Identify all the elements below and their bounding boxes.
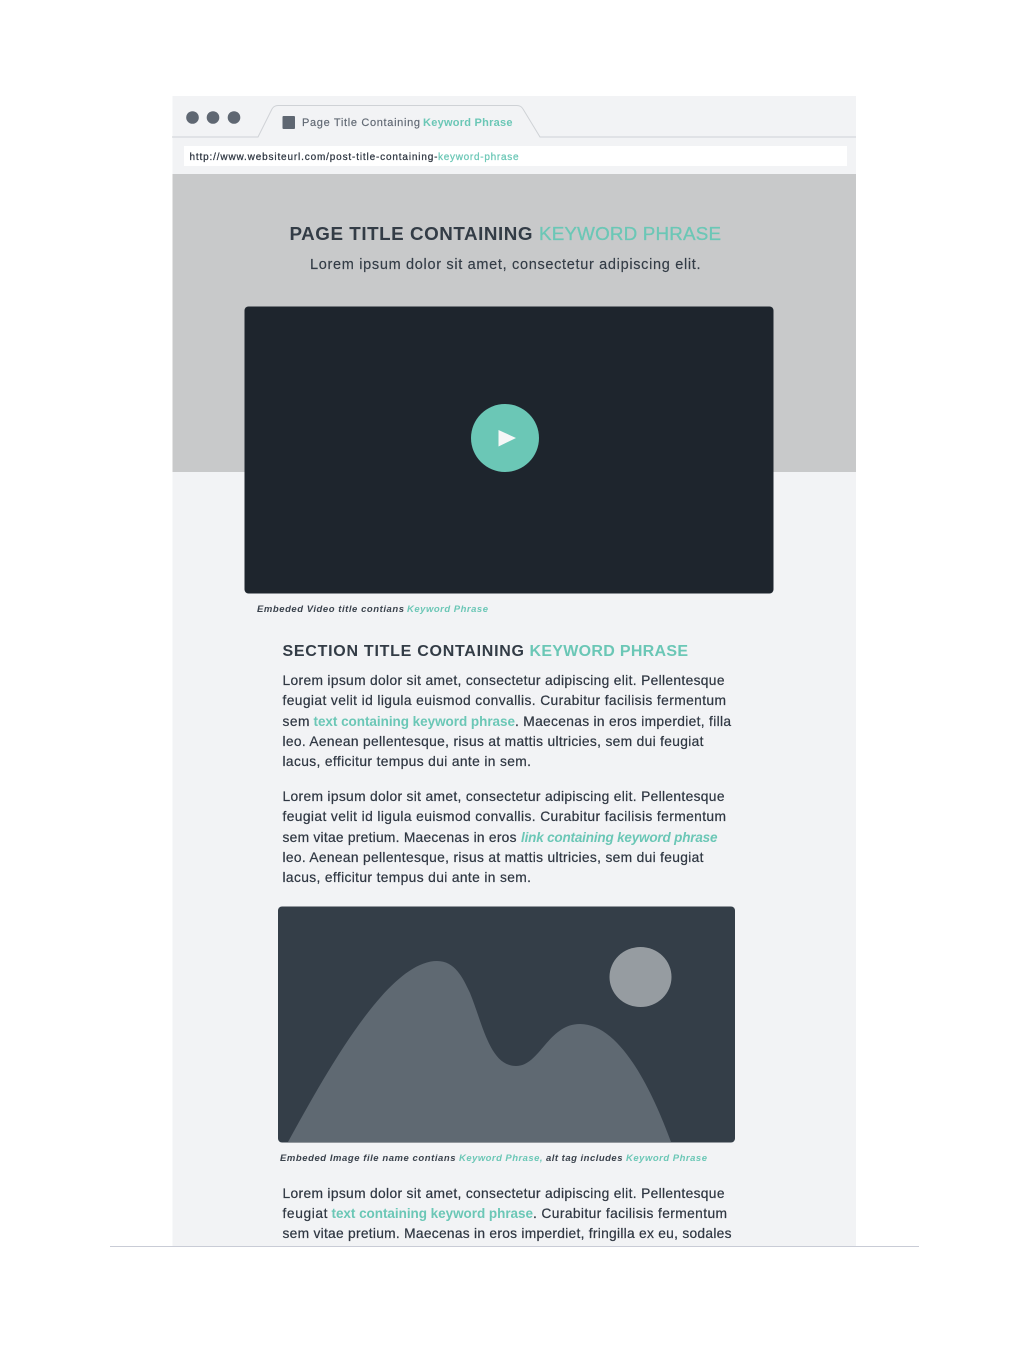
paragraph 3: sem vitae pretium. Maecenas in eros imperdiet, fringilla ex eu, sodales [282, 1226, 732, 1241]
icon: mountains [288, 961, 671, 1142]
favicon [282, 116, 295, 129]
fold line [110, 1246, 919, 1247]
paragraph 3: feugiat [282, 1206, 328, 1221]
tab title [302, 117, 512, 129]
paragraph 1: leo. Aenean pellentesque, risus at mattis ultricies, sem dui feugiat [282, 734, 704, 749]
video caption [257, 604, 489, 615]
embedded image placeholder [278, 906, 735, 1142]
section title: KEYWORD PHRASE [530, 643, 688, 660]
paragraph 3: . Curabitur facilisis fermentum [533, 1206, 727, 1221]
play button [471, 404, 539, 472]
image caption [280, 1153, 708, 1164]
browser tab bar [172, 106, 856, 137]
image caption: Embeded Image file name contians [280, 1153, 456, 1164]
page title: PAGE TITLE CONTAINING [290, 223, 532, 244]
image caption: Keyword Phrase [626, 1153, 708, 1164]
tab title: Page Title Containing [302, 117, 420, 129]
image caption: alt tag includes [546, 1153, 622, 1164]
window control dots [186, 111, 240, 124]
address bar: keyword-phrase [438, 152, 519, 163]
address bar [184, 146, 847, 166]
embedded video player [244, 306, 774, 594]
section title [282, 643, 688, 660]
paragraph 1: . Maecenas in eros imperdiet, filla [515, 714, 731, 729]
paragraph 2: sem vitae pretium. Maecenas in eros [282, 830, 517, 845]
page title: KEYWORD PHRASE [539, 223, 721, 244]
paragraph 2: link containing keyword phrase [521, 830, 718, 845]
tab title: Keyword Phrase [423, 117, 512, 129]
paragraph 3: Lorem ipsum dolor sit amet, consectetur adipiscing elit. Pellentesque [282, 1186, 725, 1201]
paragraph 1: lacus, efficitur tempus dui ante in sem. [282, 754, 531, 769]
paragraph 3 [282, 1186, 732, 1241]
paragraph 3: text containing keyword phrase [332, 1206, 533, 1221]
paragraph 2: lacus, efficitur tempus dui ante in sem. [282, 870, 531, 885]
paragraph 2: Lorem ipsum dolor sit amet, consectetur adipiscing elit. Pellentesque [282, 789, 725, 804]
video caption: Keyword Phrase [407, 604, 489, 615]
browser window [172, 96, 856, 1246]
video caption: Embeded Video title contians [257, 604, 404, 615]
icon: moon [610, 947, 672, 1007]
page title [290, 223, 721, 244]
paragraph 1: feugiat velit id ligula euismod convallis. Curabitur facilisis fermentum [282, 693, 726, 708]
page subtitle: Lorem ipsum dolor sit amet, consectetur adipiscing elit. [310, 257, 700, 273]
paragraph 2 [282, 789, 726, 885]
paragraph 2: feugiat velit id ligula euismod convallis. Curabitur facilisis fermentum [282, 809, 726, 824]
section title: SECTION TITLE CONTAINING [282, 643, 524, 660]
paragraph 2: leo. Aenean pellentesque, risus at mattis ultricies, sem dui feugiat [282, 850, 704, 865]
paragraph 1 [282, 673, 731, 769]
paragraph 1: text containing keyword phrase [314, 714, 515, 729]
paragraph 1: sem [282, 714, 310, 729]
browser tab outline [172, 106, 856, 137]
hero band [172, 174, 856, 472]
paragraph 1: Lorem ipsum dolor sit amet, consectetur adipiscing elit. Pellentesque [282, 673, 725, 688]
address bar: http://www.websiteurl.com/post-title-containing- [190, 152, 438, 163]
image caption: Keyword Phrase, [459, 1153, 542, 1164]
